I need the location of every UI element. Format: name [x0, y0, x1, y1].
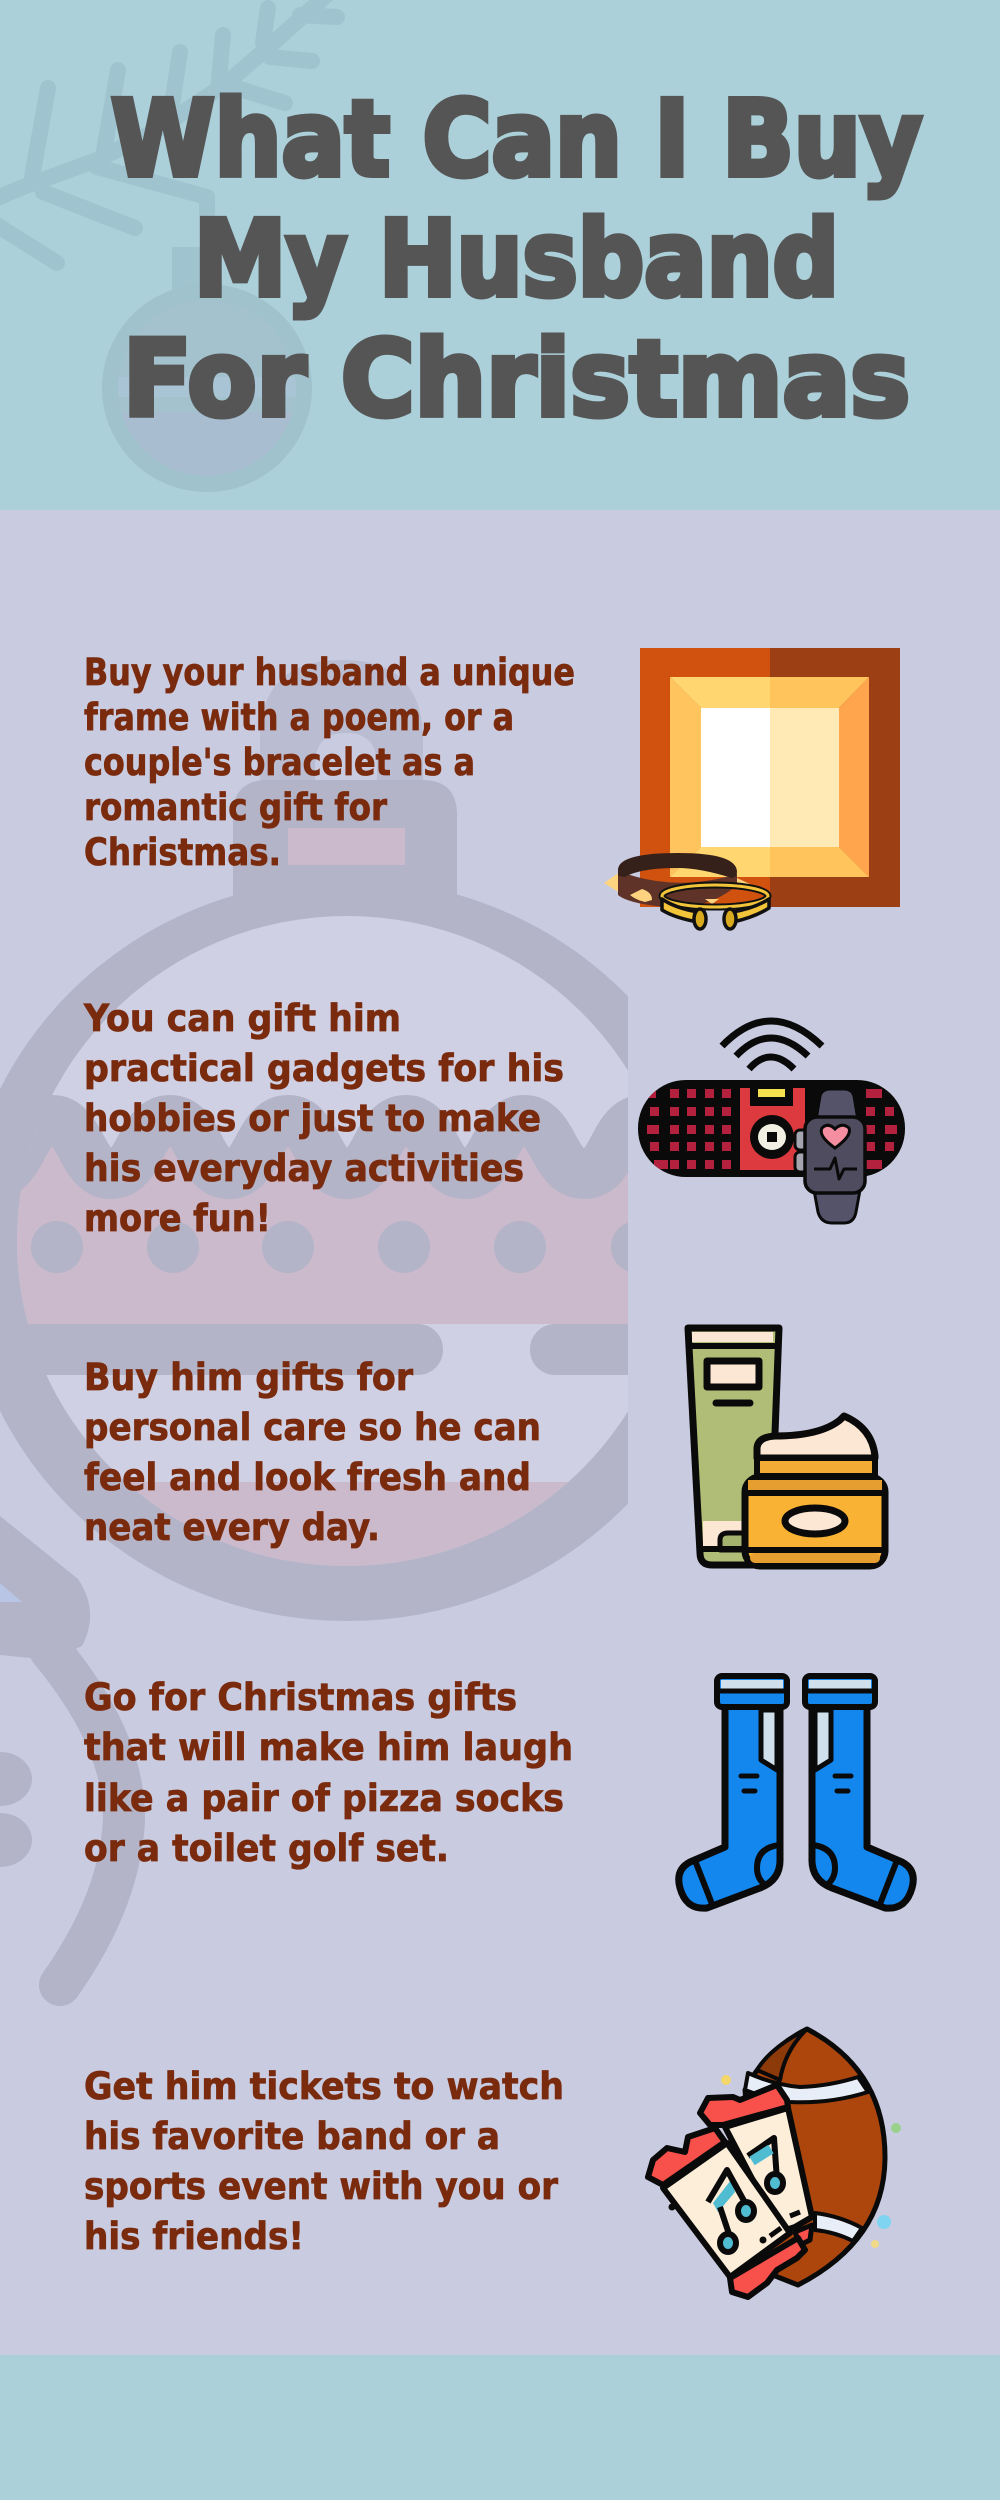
icon: pair of socks — [679, 1676, 913, 1908]
text block: tickets: sports event with you or — [84, 2165, 559, 2208]
text block: frame and bracelet: couple's bracelet as a — [84, 741, 475, 784]
icon: front ticket — [648, 2128, 805, 2297]
text block: frame and bracelet: frame with a poem, or a — [84, 696, 514, 739]
panel: bottom band — [0, 2355, 1000, 2500]
icon: back ticket — [700, 2085, 812, 2245]
text block: funny gifts: Go for Christmas gifts — [84, 1676, 517, 1719]
decoration: large faded bauble — [0, 660, 628, 1621]
text block: frame and bracelet — [84, 651, 575, 874]
text block: tickets: his friends! — [84, 2215, 304, 2258]
title — [111, 78, 922, 440]
text block: personal care: neat every day. — [84, 1506, 380, 1549]
title: My Husband — [194, 198, 839, 320]
icon: picture frame — [640, 648, 900, 907]
text block: gadgets: his everyday activities — [84, 1147, 524, 1190]
icon: football and concert tickets — [648, 2029, 901, 2297]
icon: wifi speaker and smartwatch — [638, 1021, 905, 1223]
icon: right sock — [805, 1676, 913, 1908]
text block: funny gifts: like a pair of pizza socks — [84, 1777, 564, 1820]
text block: gadgets: practical gadgets for his — [84, 1047, 564, 1090]
text block: tickets — [84, 2065, 564, 2258]
text block: gadgets: hobbies or just to make — [84, 1097, 541, 1140]
text block: frame and bracelet: Christmas. — [84, 831, 281, 874]
text block: personal care: personal care so he can — [84, 1406, 541, 1449]
text block: frame and bracelet: romantic gift for — [84, 786, 388, 829]
text block: frame and bracelet: Buy your husband a unique — [84, 651, 575, 694]
text block: tickets: his favorite band or a — [84, 2115, 500, 2158]
decoration: faded snowman at left — [0, 1516, 124, 1985]
title: For Christmas — [123, 318, 910, 440]
text block: funny gifts: or a toilet golf set. — [84, 1827, 449, 1870]
text block: personal care: Buy him gifts for — [84, 1356, 414, 1399]
panel: main lavender band — [0, 510, 1000, 2355]
icon: couple's bracelets — [604, 853, 769, 929]
text block: gadgets — [83, 997, 564, 1240]
decoration: header snowflake branch — [0, 0, 337, 263]
text block: personal care: feel and look fresh and — [84, 1456, 531, 1499]
text block: gadgets: You can gift him — [83, 997, 401, 1040]
decoration: header bauble — [100, 247, 320, 502]
icon: football — [745, 2029, 885, 2285]
text block: gadgets: more fun! — [84, 1197, 271, 1240]
text block: funny gifts — [84, 1676, 573, 1870]
icon: cream tube and jar — [688, 1328, 885, 1566]
text block: tickets: Get him tickets to watch — [84, 2065, 564, 2108]
panel: top header band — [0, 0, 1000, 510]
text block: funny gifts: that will make him laugh — [84, 1726, 573, 1769]
text block: personal care — [84, 1356, 541, 1549]
icon: left sock — [679, 1676, 787, 1908]
icon: confetti — [721, 2075, 901, 2248]
title: What Can I Buy — [111, 78, 922, 200]
